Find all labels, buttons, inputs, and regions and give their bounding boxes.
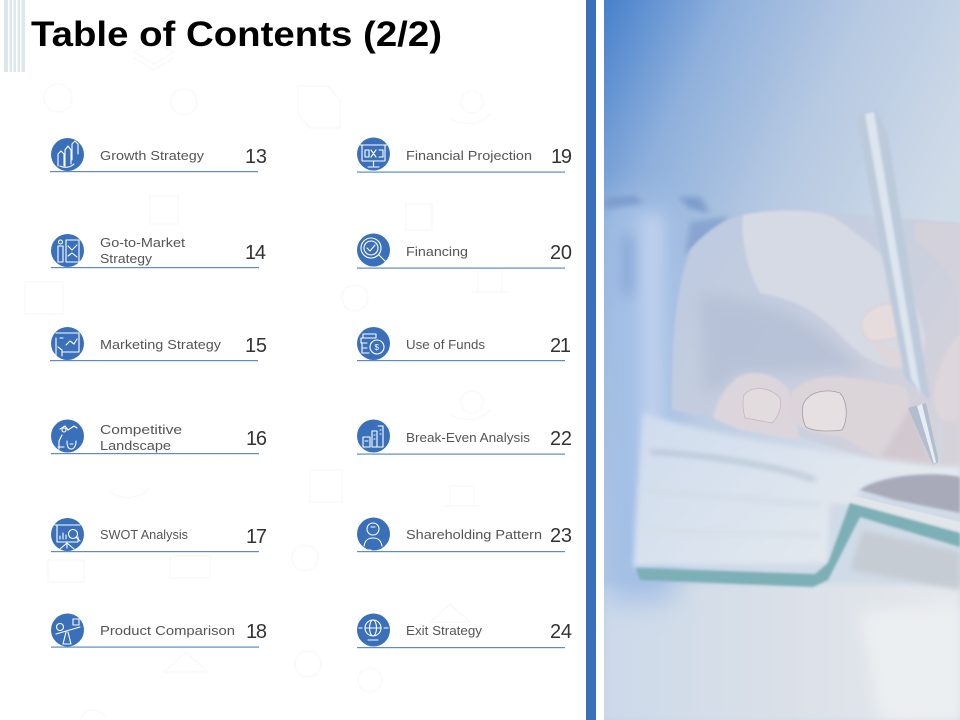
label: Exit Strategy bbox=[406, 624, 483, 638]
right column item: Exit Strategy bbox=[357, 614, 572, 648]
pen bbox=[857, 110, 942, 465]
label: Shareholding Pattern bbox=[406, 528, 542, 542]
icon: break-even buildings bbox=[357, 420, 390, 452]
icon: competitive figures bbox=[51, 420, 84, 452]
number: 20 bbox=[550, 242, 572, 264]
right column item: Financial Projection bbox=[357, 138, 572, 173]
label: Use of Funds bbox=[406, 338, 485, 352]
icon: market board bbox=[51, 234, 84, 267]
title: Table of Contents (2/2) bbox=[31, 15, 442, 54]
number: 19 bbox=[551, 146, 572, 168]
faint watermark icons bbox=[25, 42, 508, 718]
icon: shareholder bbox=[357, 518, 390, 550]
left column item: SWOT Analysis bbox=[51, 518, 267, 552]
dark page bbox=[860, 474, 960, 513]
icon: magnifier with check bbox=[357, 234, 390, 266]
shadow under the thumb bbox=[704, 300, 854, 385]
label: SWOT Analysis bbox=[100, 528, 188, 542]
label bbox=[100, 423, 182, 453]
number: 14 bbox=[245, 242, 266, 264]
right column item: Use of Funds bbox=[357, 327, 571, 361]
hand bbox=[672, 210, 960, 470]
number: 16 bbox=[246, 428, 267, 450]
thumb nail bbox=[862, 304, 897, 340]
left column item: Product Comparison bbox=[51, 614, 267, 648]
photo: hand writing in a book bbox=[604, 0, 960, 720]
label: Go-to-Market bbox=[100, 236, 186, 250]
label: Product Comparison bbox=[100, 624, 235, 638]
number: 23 bbox=[550, 525, 572, 547]
icon: marketing chart bbox=[51, 327, 84, 360]
number: 17 bbox=[246, 526, 267, 548]
open book bbox=[633, 413, 960, 590]
back of hand bbox=[672, 210, 960, 470]
right column item: Shareholding Pattern bbox=[357, 518, 572, 552]
left column item: Growth Strategy bbox=[50, 138, 267, 172]
label: Landscape bbox=[100, 439, 171, 453]
book cover bbox=[636, 503, 960, 587]
number: 15 bbox=[245, 335, 267, 357]
icon: financial screen bbox=[357, 138, 390, 170]
thumb bbox=[742, 211, 925, 367]
left column item: Marketing Strategy bbox=[50, 327, 267, 361]
right fingers bbox=[934, 338, 959, 416]
number: 13 bbox=[245, 146, 267, 168]
decorative stripes bbox=[4, 0, 25, 72]
finger nails bbox=[743, 389, 781, 423]
label bbox=[100, 236, 186, 266]
shadow under cover bbox=[850, 530, 960, 590]
number: 22 bbox=[550, 428, 572, 450]
right column item: Break-Even Analysis bbox=[357, 420, 572, 455]
label: Competitive bbox=[100, 423, 182, 437]
photo background bbox=[604, 0, 960, 720]
icon: growth arrows bbox=[51, 138, 84, 171]
label: Financing bbox=[406, 245, 468, 259]
number: 18 bbox=[246, 621, 267, 643]
label: Marketing Strategy bbox=[100, 338, 222, 352]
label: Strategy bbox=[100, 252, 153, 266]
icon: globe with arrows bbox=[357, 614, 390, 646]
blurred sleeve bbox=[604, 195, 730, 600]
label: Financial Projection bbox=[406, 149, 532, 163]
icon: coins bbox=[357, 327, 390, 360]
left column item: Competitive Landscape bbox=[51, 420, 267, 454]
lower fingers bbox=[713, 373, 800, 440]
right column item: Financing bbox=[357, 234, 572, 269]
number: 21 bbox=[550, 335, 571, 357]
icon: balance scale bbox=[51, 614, 84, 646]
icon: coins: $ bbox=[374, 343, 380, 352]
icon: SWOT presentation bbox=[51, 518, 84, 551]
number: 24 bbox=[550, 621, 572, 643]
label: Break-Even Analysis bbox=[406, 431, 530, 445]
left column item: Go-to-Market Strategy bbox=[51, 234, 266, 268]
label: Growth Strategy bbox=[100, 149, 205, 163]
blue divider bar bbox=[586, 0, 596, 720]
